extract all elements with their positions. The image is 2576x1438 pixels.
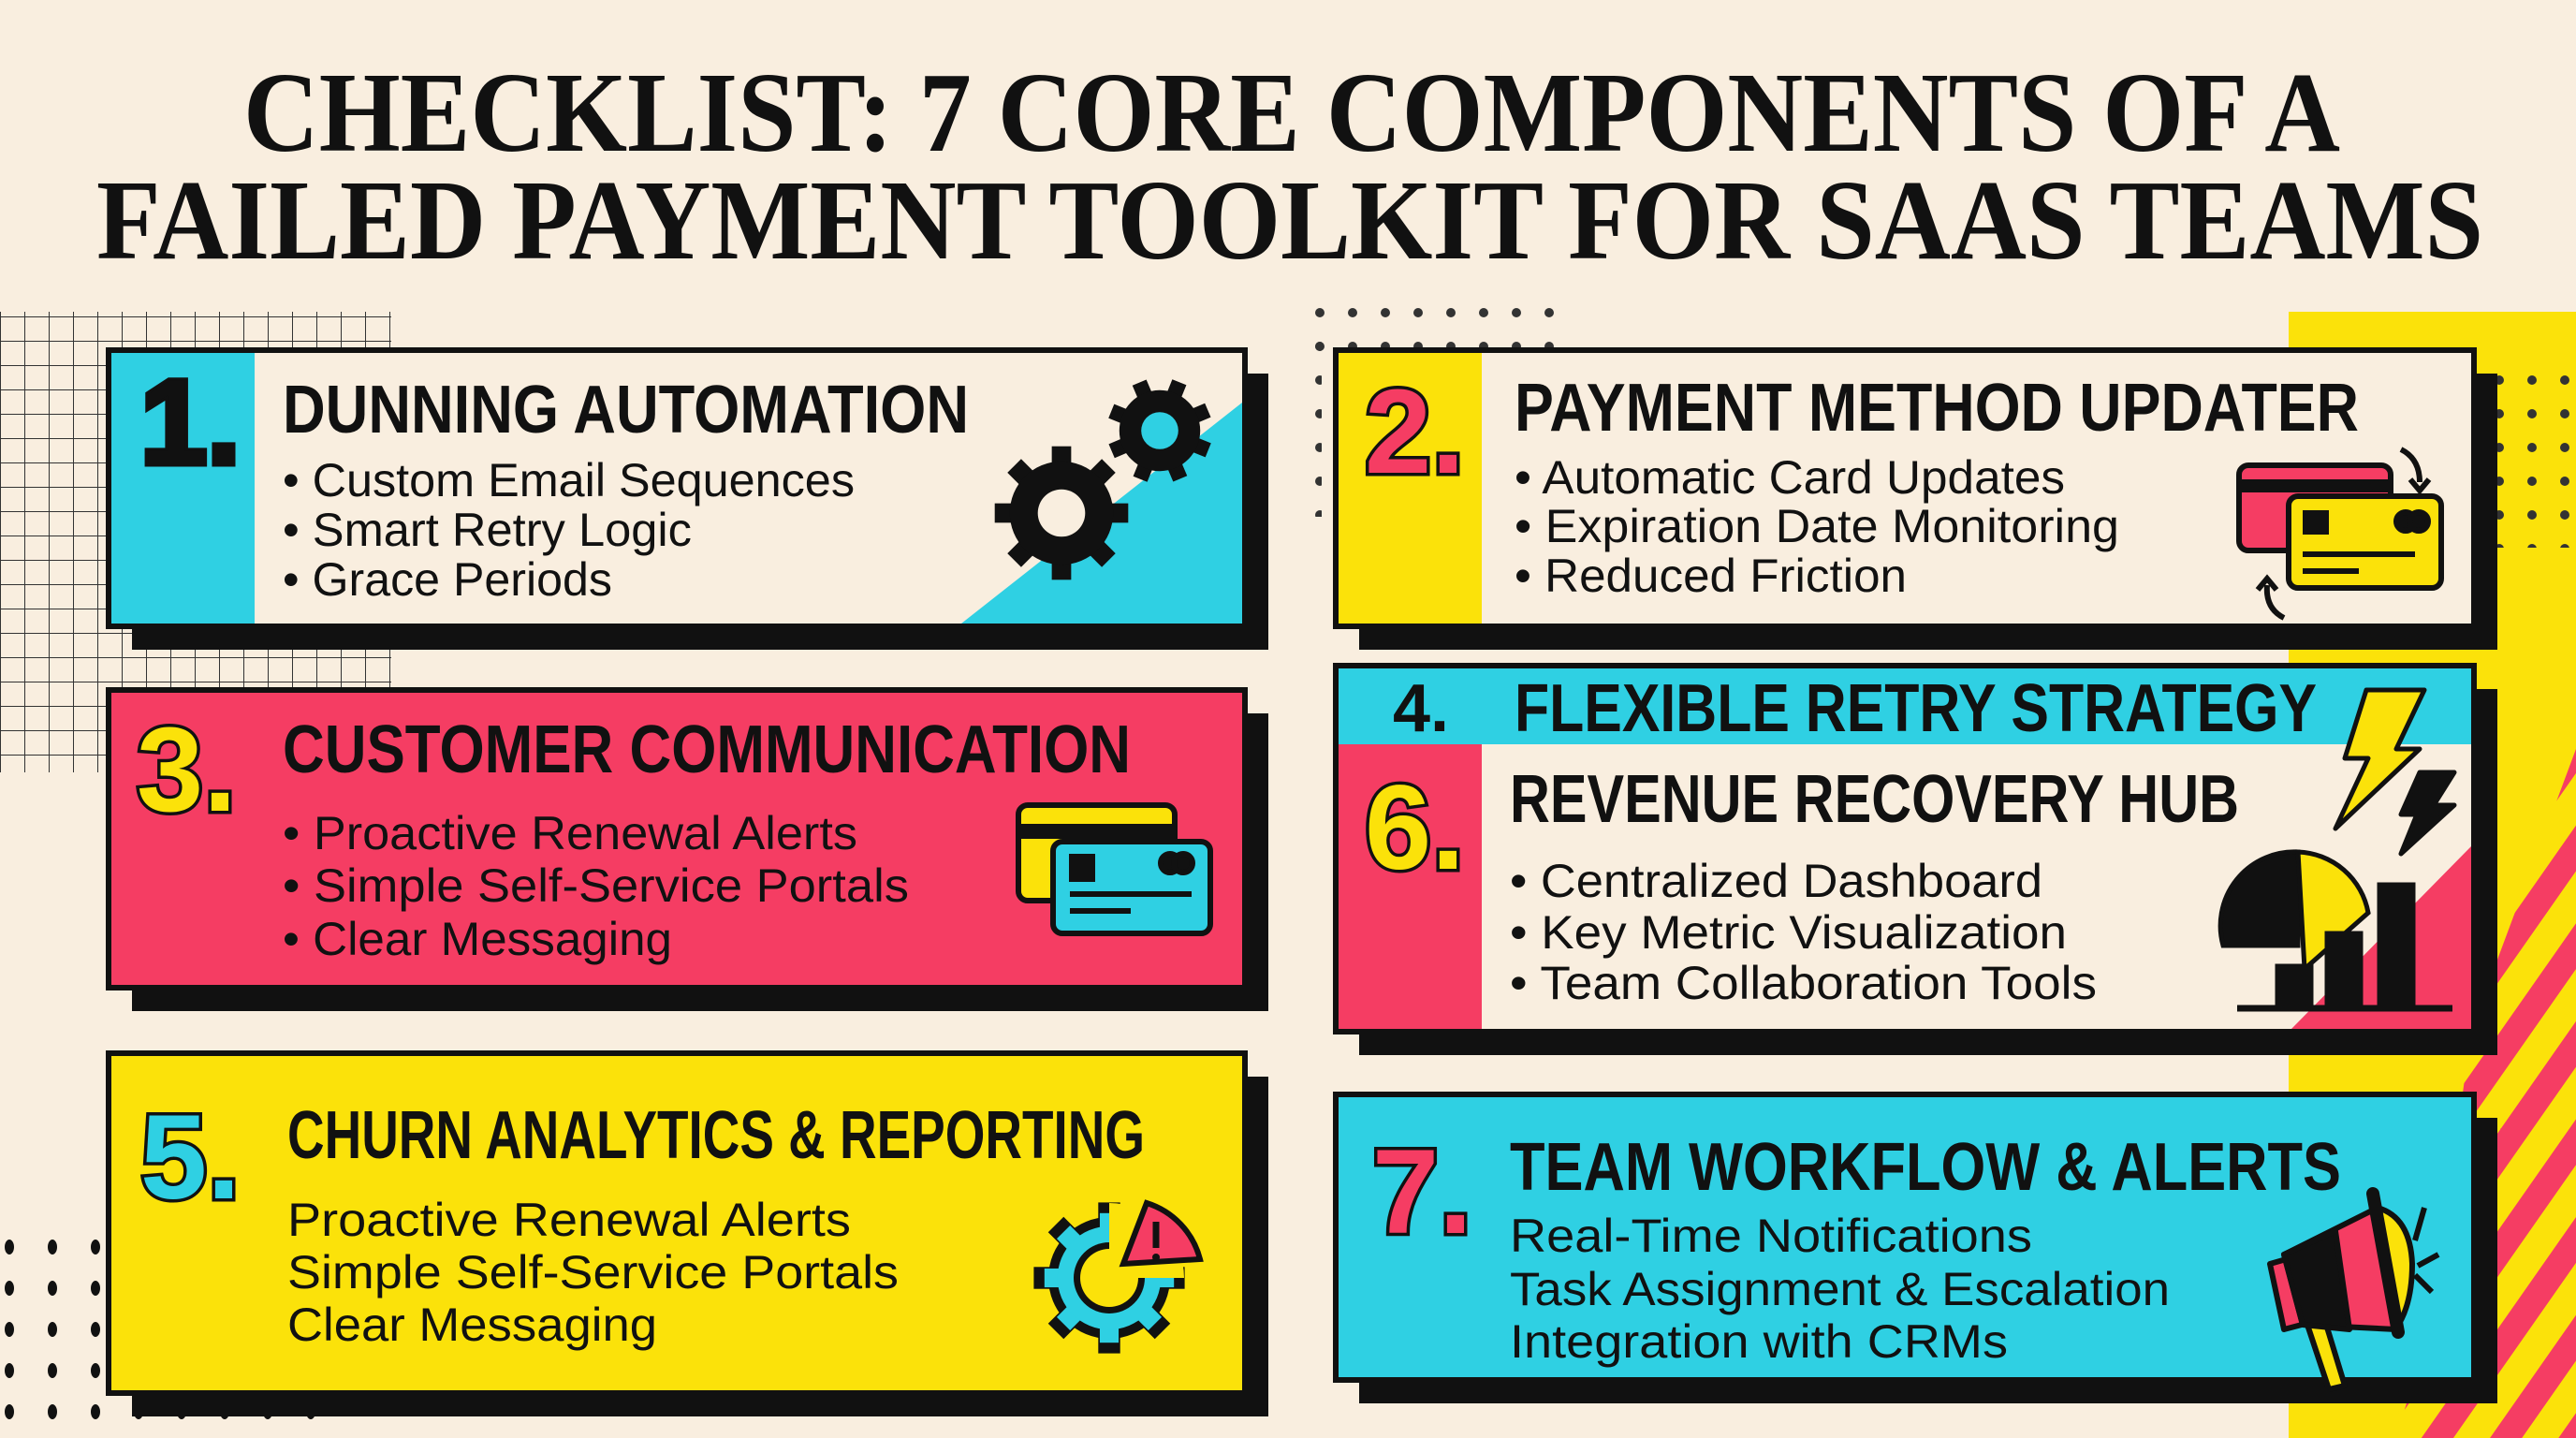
icon: gear with alert wedge (1033, 1202, 1200, 1354)
items 7 (1510, 1210, 2170, 1368)
bullets 3: • Clear Messaging (283, 913, 672, 965)
items 5 (287, 1194, 899, 1351)
icon: gears (995, 362, 1228, 580)
heading 2: PAYMENT METHOD UPDATER (1515, 371, 2359, 446)
number 5: 5. (140, 1091, 241, 1225)
background grid (0, 312, 391, 772)
bullets 2: • Expiration Date Monitoring (1515, 500, 2119, 552)
number 7: 7. (1372, 1125, 1472, 1259)
items 7: Integration with CRMs (1510, 1315, 2008, 1368)
bullets 1: • Smart Retry Logic (283, 504, 692, 556)
number 3: 3. (137, 703, 237, 837)
background dots (0, 305, 2576, 1436)
title (96, 50, 2483, 284)
icon: megaphone (2270, 1194, 2438, 1389)
bullets 1: • Custom Email Sequences (283, 454, 855, 506)
bullets 2: • Reduced Friction (1515, 550, 1907, 602)
bullets 2: • Automatic Card Updates (1515, 451, 2065, 504)
icon: lightning bolts (2335, 690, 2454, 854)
panel 5: churn analytics (109, 1053, 1268, 1416)
bullets 1: • Grace Periods (283, 553, 612, 606)
items 5: Clear Messaging (287, 1299, 657, 1351)
panel 2: payment method updater (1336, 350, 2497, 650)
bullets 2 (1515, 451, 2119, 602)
items 5: Proactive Renewal Alerts (287, 1194, 851, 1246)
bullets 3: • Simple Self-Service Portals (283, 859, 909, 912)
panel 1: dunning automation (109, 350, 1268, 650)
number 6: 6. (1365, 761, 1465, 895)
heading 6: REVENUE RECOVERY HUB (1510, 762, 2239, 837)
heading 5: CHURN ANALYTICS & REPORTING (287, 1098, 1145, 1173)
bullets 3: • Proactive Renewal Alerts (283, 807, 857, 859)
bullets 6: • Key Metric Visualization (1510, 906, 2067, 959)
title: CHECKLIST: 7 CORE COMPONENTS OF A (243, 50, 2340, 176)
icon: credit cards (1018, 805, 1210, 933)
number 2: 2. (1365, 365, 1465, 499)
items 7: Task Assignment & Escalation (1510, 1263, 2170, 1315)
bullets 3 (283, 807, 909, 965)
heading 7: TEAM WORKFLOW & ALERTS (1510, 1130, 2341, 1205)
items 7: Real-Time Notifications (1510, 1210, 2032, 1262)
bullets 6: • Team Collaboration Tools (1510, 957, 2097, 1009)
heading 3: CUSTOMER COMMUNICATION (283, 712, 1131, 787)
heading 1: DUNNING AUTOMATION (283, 373, 969, 448)
icon: cards with arrows (2239, 449, 2441, 618)
bullets 6 (1510, 855, 2097, 1009)
heading 4: 4. (1393, 671, 1449, 746)
bullets 6: • Centralized Dashboard (1510, 855, 2042, 907)
panel 3: customer communication (109, 690, 1268, 1011)
heading 4: FLEXIBLE RETRY STRATEGY (1515, 671, 2317, 746)
background yellow band (2289, 312, 2576, 1438)
bullets 1 (283, 454, 855, 606)
panel 7: team workflow & alerts (1336, 1094, 2497, 1403)
number 1: 1. (140, 356, 241, 490)
background stripes (2404, 749, 2576, 1438)
icon: chart (2220, 852, 2452, 1008)
panel 4/6: flexible retry strategy & revenue recovery hub (1336, 666, 2497, 1055)
items 5: Simple Self-Service Portals (287, 1246, 899, 1299)
